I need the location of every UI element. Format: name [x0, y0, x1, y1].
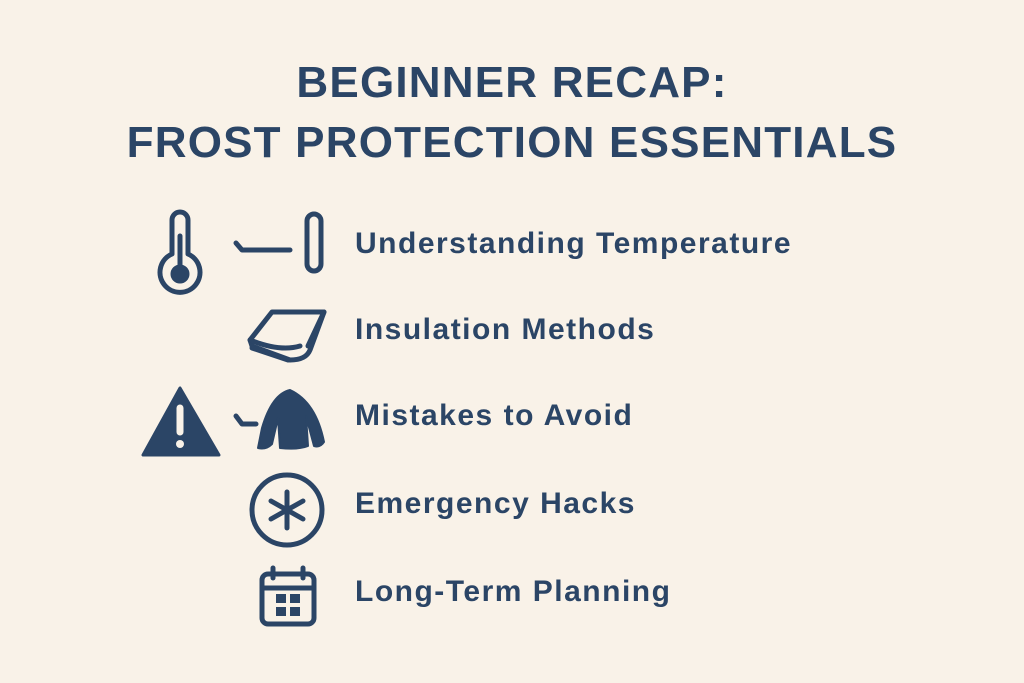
item: emergency: Emergency Hacks — [355, 487, 636, 520]
icon: snowflake circle — [252, 475, 322, 545]
title — [127, 58, 897, 167]
item: insulation: Insulation Methods — [355, 313, 655, 346]
item: mistakes: Mistakes to Avoid — [355, 399, 633, 432]
icon: blanket — [250, 312, 324, 360]
icon: coat — [236, 390, 324, 449]
title: BEGINNER RECAP: — [296, 58, 728, 107]
icon: thermometer — [160, 212, 200, 292]
item: long-term: Long-Term Planning — [355, 575, 671, 608]
arrow: thermometer to small thermometer — [236, 214, 321, 271]
icon: calendar — [262, 568, 314, 624]
title: FROST PROTECTION ESSENTIALS — [127, 118, 897, 167]
item: temperature: Understanding Temperature — [355, 227, 792, 260]
icon: warning triangle — [143, 388, 219, 455]
